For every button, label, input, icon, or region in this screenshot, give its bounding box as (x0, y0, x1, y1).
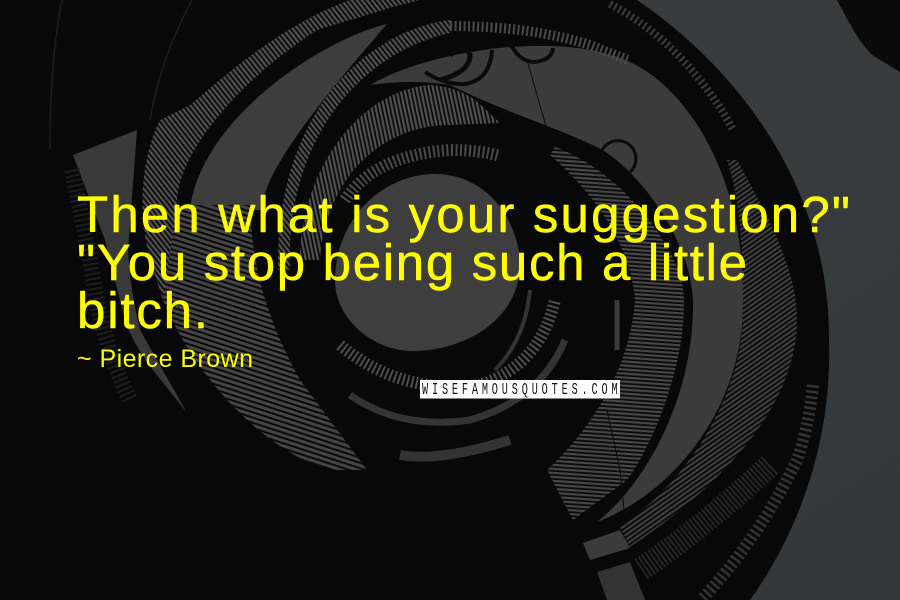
attribution: ~ Pierce Brown (77, 345, 253, 373)
quote text: "You stop being such a little (77, 234, 747, 291)
quote text: Then what is your suggestion?" (77, 186, 850, 243)
quote text: bitch. (77, 282, 208, 339)
watermark badge: WISEFAMOUSQUOTES.COM (422, 381, 618, 400)
quote text (77, 186, 850, 339)
